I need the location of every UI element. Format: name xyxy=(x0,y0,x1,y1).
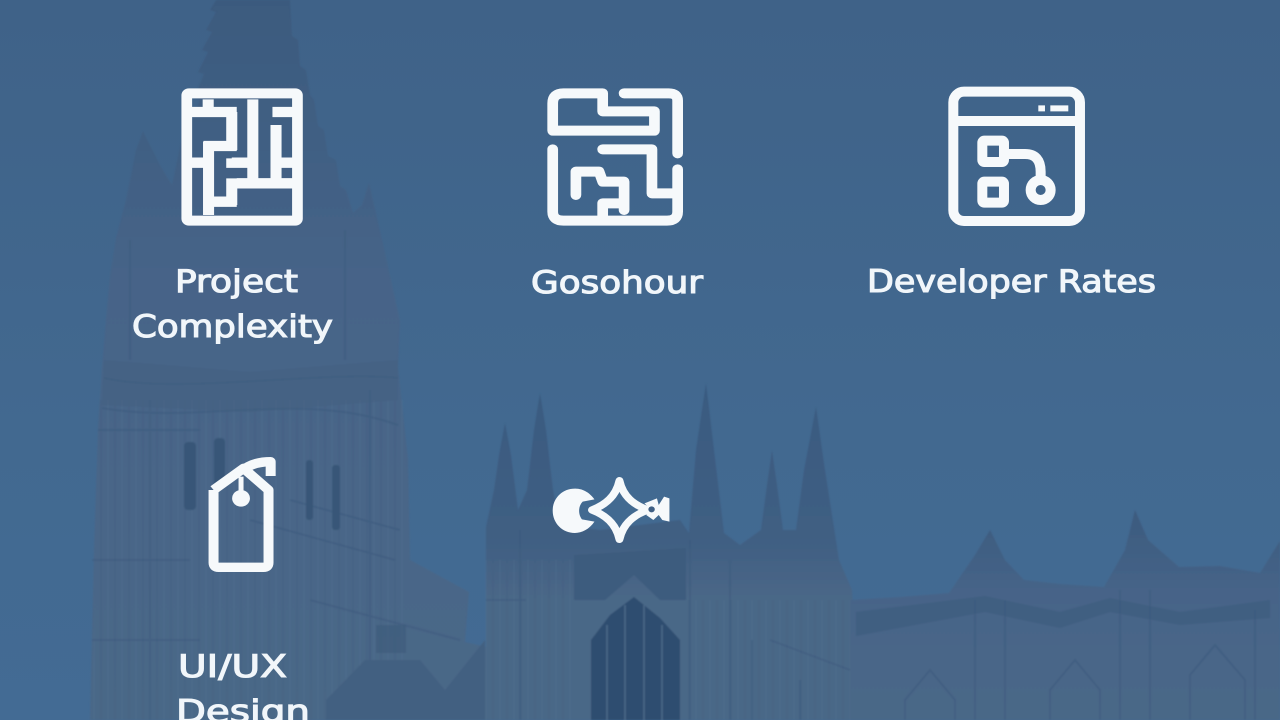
icon: price tag xyxy=(214,462,271,567)
nave parapet band xyxy=(856,596,1270,636)
west front dark gable xyxy=(574,548,686,600)
nave roofline xyxy=(850,510,1280,720)
great pointed window xyxy=(591,597,680,720)
label: Project Complexity xyxy=(132,264,333,345)
label: Project Complexity: Complexity xyxy=(132,309,333,345)
west front ribbing xyxy=(486,560,858,720)
icon: maze with rounded corners xyxy=(553,93,678,221)
tower belfry band xyxy=(102,360,398,412)
west front towers and spires xyxy=(486,383,858,720)
label: UI/UX Design: UI/UX xyxy=(178,649,287,685)
main tower xyxy=(90,0,500,720)
buttress and nave details xyxy=(486,530,1255,720)
label: Project Complexity: Project xyxy=(175,264,298,300)
icon: project complexity maze xyxy=(187,93,297,221)
icon: crescent and diamond glyph xyxy=(553,481,669,539)
label: Developer Rates: Developer Rates xyxy=(867,264,1156,300)
icon: developer rates browser window xyxy=(953,92,1080,221)
lower dome roof xyxy=(326,640,485,720)
label: Gosohour: Gosohour xyxy=(531,265,703,301)
tower details xyxy=(92,230,460,720)
label: UI/UX Design xyxy=(176,649,310,720)
tower stone ribbing xyxy=(92,400,405,720)
tower slit windows xyxy=(184,438,406,653)
